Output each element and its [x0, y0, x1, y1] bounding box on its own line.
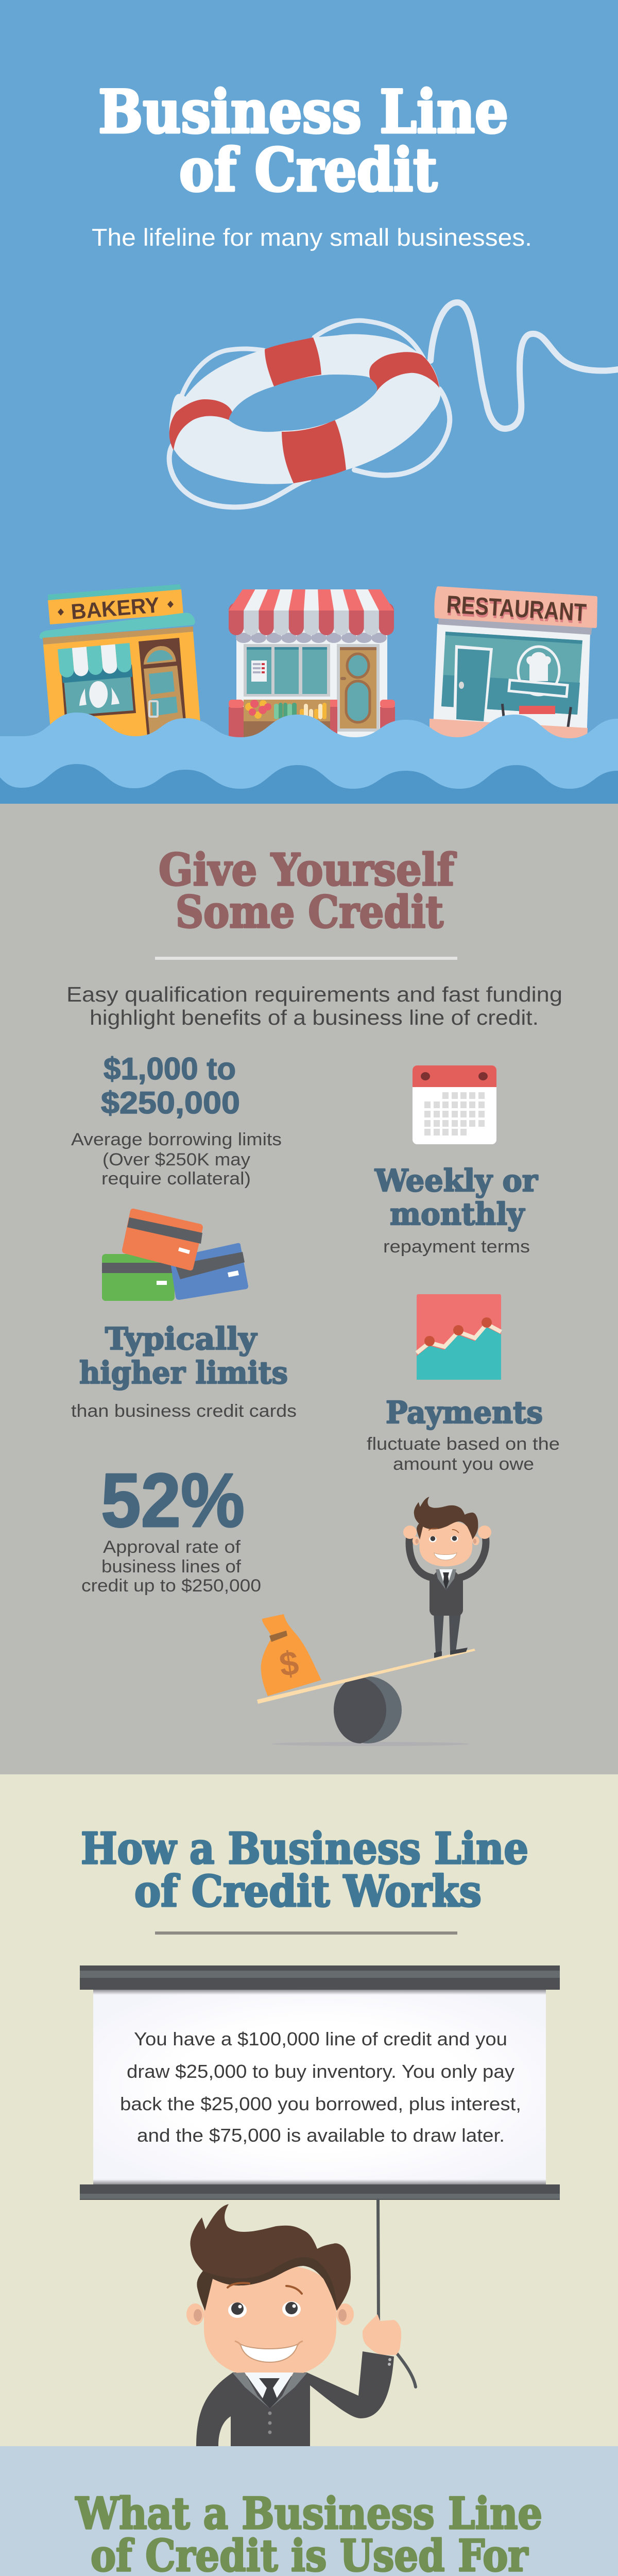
stat: 52 percent: credit up to $250,000 — [81, 1576, 261, 1596]
stat: payments: Payments — [386, 1395, 543, 1430]
intro text: highlight benefits of a business line of credit. — [90, 1006, 539, 1029]
title: Business Line — [98, 77, 508, 146]
heading: How a Business Line — [81, 1823, 528, 1874]
stat: repayment terms: repayment terms — [383, 1237, 530, 1257]
icon: bakery shop — [40, 584, 202, 742]
stat: borrowing limits: require collateral) — [101, 1169, 251, 1189]
stat: payments — [367, 1395, 560, 1474]
title: of Credit — [179, 135, 437, 205]
stat: repayment terms — [374, 1163, 538, 1257]
icon: life ring with rope — [169, 302, 618, 507]
screen text: draw $25,000 to buy inventory. You only pay — [127, 2061, 514, 2082]
illustration: businessman pulling screen cord — [186, 2200, 416, 2446]
heading — [81, 1823, 528, 1917]
sign text: restaurant: RESTAURANT — [446, 594, 588, 630]
intro text — [66, 982, 562, 1029]
screen text: back the $25,000 you borrowed, plus interest, — [120, 2093, 521, 2114]
panel: what a business line of credit is used for — [0, 2446, 618, 2576]
heading — [159, 844, 457, 938]
panel: hero — [0, 0, 618, 804]
stat: borrowing limits: (Over $250K may — [102, 1150, 250, 1170]
icon: restaurant shop: RESTAURANT — [445, 591, 587, 627]
stat: 52 percent: business lines of — [101, 1557, 242, 1577]
illustration: man on seesaw with money bag: $ — [277, 1643, 301, 1684]
icon: credit cards — [102, 1209, 248, 1301]
screen text: and the $75,000 is available to draw later. — [137, 2125, 505, 2146]
heading: of Credit Works — [134, 1866, 482, 1917]
stat: borrowing limits: $250,000 — [101, 1086, 240, 1120]
stat: higher limits: Typically — [105, 1321, 258, 1357]
stat: borrowing limits: Average borrowing limits — [71, 1130, 282, 1149]
stat: 52 percent: Approval rate of — [103, 1537, 241, 1557]
icon: line chart — [417, 1294, 501, 1380]
intro text: Easy qualification requirements and fast funding — [66, 982, 562, 1006]
heading: Give Yourself — [159, 844, 457, 896]
screen text: You have a $100,000 line of credit and you — [134, 2028, 507, 2049]
stat: payments: amount you owe — [393, 1454, 534, 1474]
heading — [75, 2488, 542, 2576]
stat: higher limits: higher limits — [79, 1355, 288, 1391]
panel: give yourself some credit — [0, 804, 618, 1774]
icon: grocery shop — [229, 589, 395, 739]
projector screen — [80, 1965, 560, 2200]
illustration: man on seesaw with money bag — [257, 1497, 491, 1746]
stat: borrowing limits: $1,000 to — [104, 1052, 236, 1086]
stat: 52 percent — [81, 1458, 261, 1596]
heading: What a Business Line — [75, 2488, 542, 2539]
stat: higher limits — [71, 1321, 297, 1421]
icon: calendar — [413, 1065, 496, 1144]
icon: restaurant shop — [430, 588, 596, 742]
heading: Some Credit — [176, 887, 443, 938]
sign text: bakery: BAKERY — [70, 592, 160, 624]
stat: repayment terms: monthly — [390, 1196, 525, 1232]
stat: borrowing limits — [71, 1052, 282, 1189]
subtitle: The lifeline for many small businesses. — [92, 224, 532, 251]
title — [98, 77, 508, 205]
stat: higher limits: than business credit cards — [71, 1401, 297, 1421]
water waves — [0, 713, 618, 804]
stat: payments: fluctuate based on the — [367, 1434, 560, 1454]
stat: 52 percent: 52% — [101, 1458, 245, 1543]
screen text — [120, 2028, 521, 2146]
panel: how a business line of credit works — [0, 1774, 618, 2446]
stat: repayment terms: Weekly or — [374, 1163, 538, 1198]
